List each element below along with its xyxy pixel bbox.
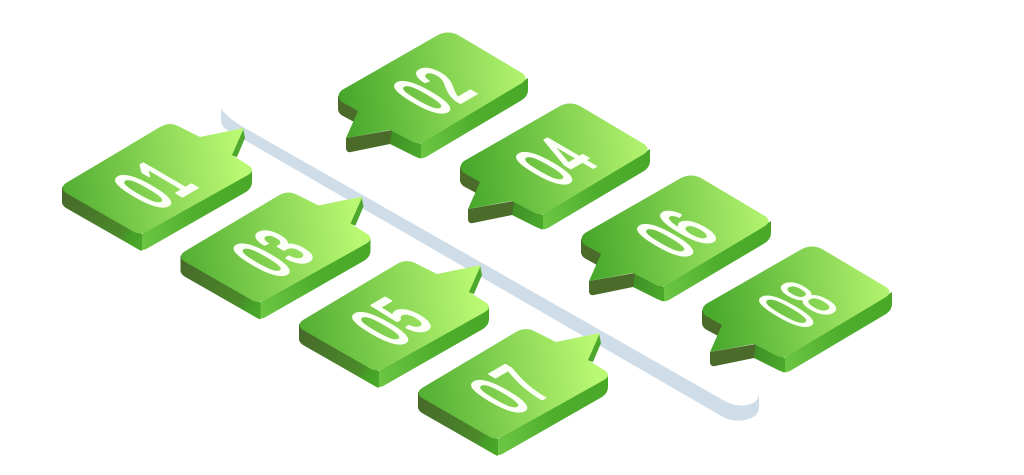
number 04: 04 xyxy=(497,127,617,197)
card 07 xyxy=(418,329,608,456)
number 02: 02 xyxy=(375,56,495,126)
number 03: 03 xyxy=(215,218,335,288)
card 04 xyxy=(460,104,650,229)
card 06 xyxy=(581,176,771,301)
platform panel xyxy=(221,100,759,421)
card 08 xyxy=(702,246,892,372)
number 07: 07 xyxy=(452,355,572,425)
number 06: 06 xyxy=(618,199,738,269)
card 05 xyxy=(299,261,489,388)
number 05: 05 xyxy=(333,287,453,357)
number 01: 01 xyxy=(96,150,216,220)
card 02 xyxy=(338,32,528,158)
card 01 xyxy=(62,124,252,251)
number 08: 08 xyxy=(739,270,859,340)
card 03 xyxy=(180,192,370,320)
